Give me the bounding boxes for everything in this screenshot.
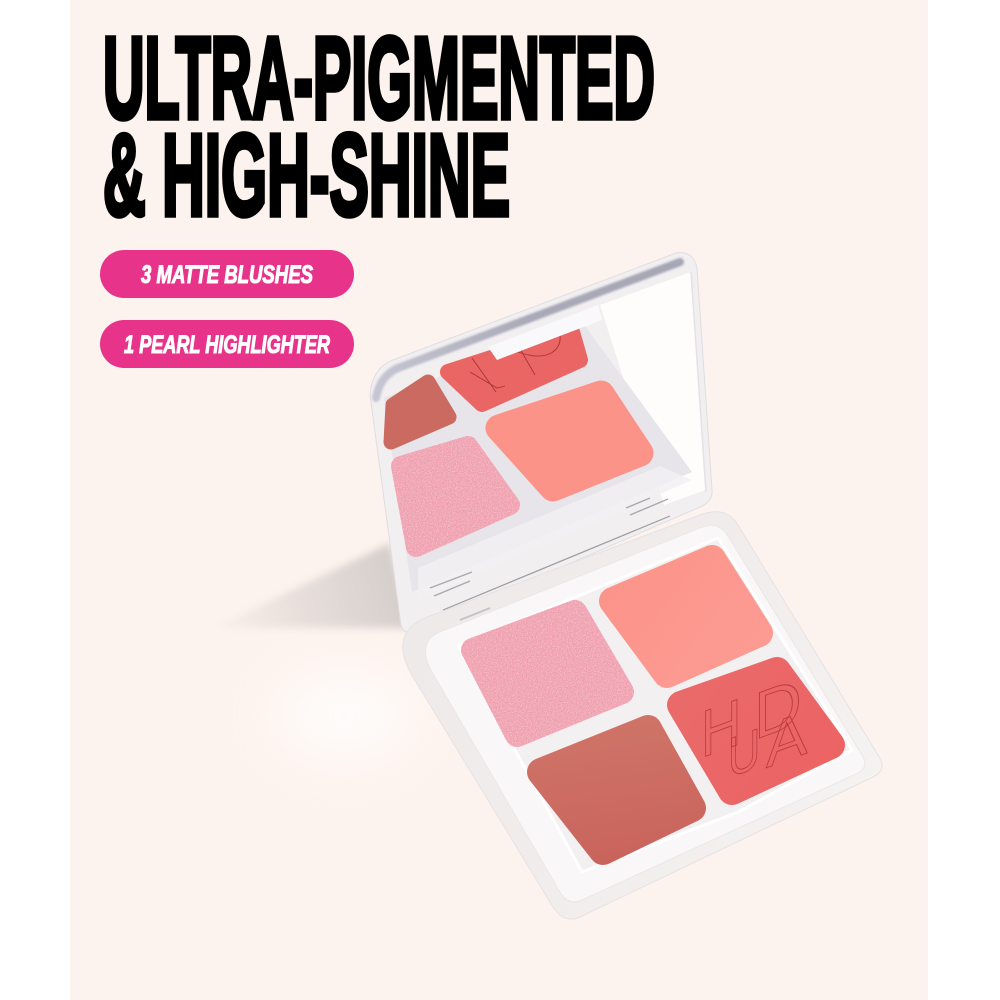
compact base	[403, 512, 882, 919]
embossed logo: D	[754, 664, 802, 755]
lid shell	[370, 253, 712, 632]
pan well	[458, 538, 852, 872]
mirror surface	[600, 272, 705, 505]
mauve blush pan	[541, 729, 692, 851]
base hinge line	[443, 516, 670, 610]
white tab over red reflection	[488, 305, 602, 360]
mirror lower frame	[418, 466, 692, 600]
embossed logo	[701, 664, 808, 791]
lid hinges	[430, 498, 668, 596]
embossed logo: U	[728, 717, 760, 791]
base shell	[403, 512, 882, 919]
reflected logo lines	[470, 335, 560, 392]
mirror tray reflection	[384, 322, 692, 592]
embossed logo: A	[766, 697, 808, 782]
reflected pearl pan	[401, 446, 510, 547]
compact lid with mirror	[370, 253, 712, 632]
reflected peach pan	[499, 394, 640, 488]
pill: 1 pearl highlighter	[100, 320, 354, 368]
cast shadow of the lid and light pool	[213, 543, 415, 760]
title: & HIGH-SHINE	[103, 110, 510, 240]
base inner rim	[426, 525, 865, 902]
top grey band	[376, 262, 680, 398]
pill: 3 matte blushes: 3 MATTE BLUSHES	[141, 261, 313, 289]
title	[103, 13, 655, 240]
embossed logo: H	[701, 685, 742, 773]
reflected brown pan	[391, 382, 449, 442]
red blush pan with logo	[681, 664, 831, 791]
pill: 3 matte blushes	[100, 250, 354, 298]
lid right inner edge	[691, 272, 706, 492]
peach blush pan	[613, 559, 759, 674]
pearl highlighter pan	[473, 612, 622, 735]
pill: 1 pearl highlighter: 1 PEARL HIGHLIGHTER	[124, 331, 330, 359]
reflected red pan	[448, 332, 580, 404]
